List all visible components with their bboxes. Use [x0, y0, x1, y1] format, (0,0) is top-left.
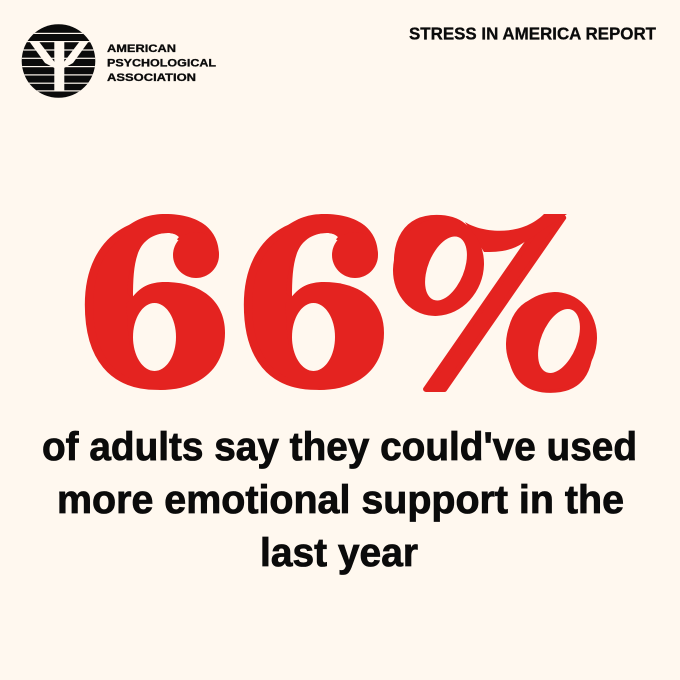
logo: American Psychological Association: [20, 23, 216, 99]
statement text: more emotional support in the: [57, 478, 624, 522]
statement text: of adults say they could've used: [42, 425, 637, 469]
icon: striped circle with psi symbol: [20, 23, 98, 99]
statement text: last year: [260, 531, 418, 575]
big statistic: 66%: [79, 160, 622, 443]
big statistic: 66%: 6: [238, 166, 384, 438]
logo wordmark: PSYCHOLOGICAL: [107, 58, 216, 70]
logo wordmark: ASSOCIATION: [107, 72, 196, 84]
big statistic: 66%: %: [362, 160, 622, 443]
logo wordmark: [107, 43, 216, 84]
statement text: [42, 425, 637, 575]
big statistic: 66%: 6: [79, 166, 225, 438]
logo wordmark: AMERICAN: [107, 43, 176, 55]
report title: STRESS IN AMERICA REPORT: [409, 24, 656, 44]
